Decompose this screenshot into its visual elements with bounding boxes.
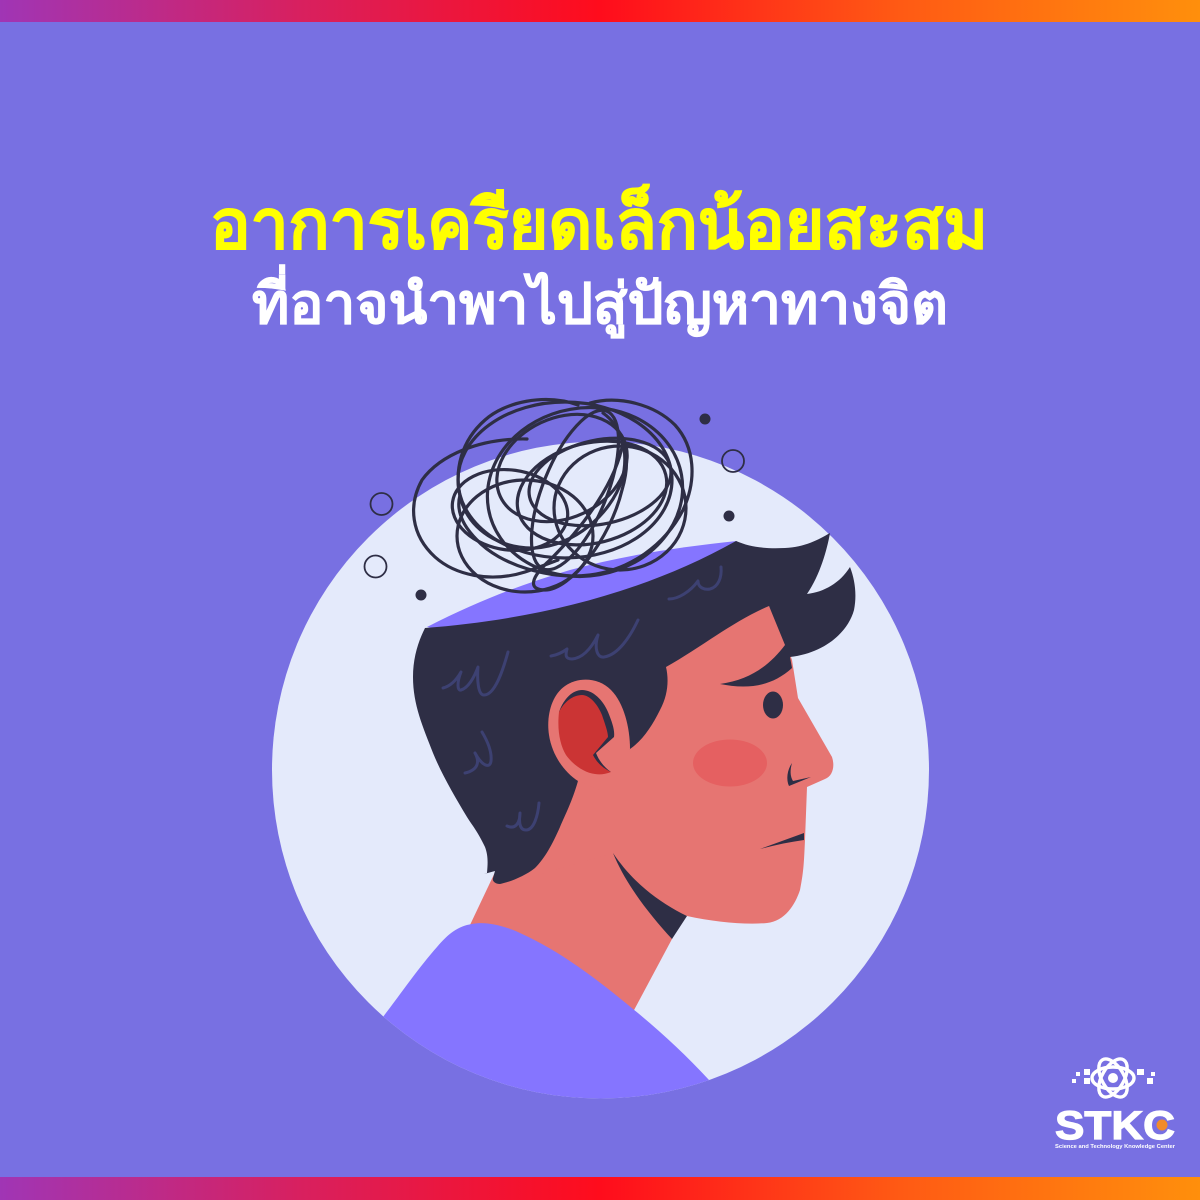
eye (763, 692, 783, 718)
blush (693, 740, 767, 786)
logo atom icon (1092, 1054, 1134, 1102)
nose mark (787, 763, 811, 786)
title line 2: ที่อาจนำพาไปสู่ปัญหาทางจิต (252, 264, 948, 339)
title (210, 184, 988, 339)
logo: STKC (1055, 1054, 1176, 1150)
dots and bubbles (364, 414, 744, 600)
hair (413, 533, 855, 884)
jaw shadow (613, 853, 687, 939)
logo pixel squares (1072, 1069, 1155, 1084)
top gradient bar (0, 0, 1200, 22)
shirt (384, 923, 709, 1098)
illustration: man's head (370, 533, 855, 1120)
neck (440, 820, 690, 1012)
scribble (414, 392, 696, 592)
ear (548, 680, 630, 790)
logo wordmark: STKC (1055, 1104, 1175, 1148)
hair curls (443, 567, 721, 830)
logo orange dot (1156, 1120, 1168, 1130)
ear inner dark (559, 690, 614, 772)
head opening (427, 541, 737, 640)
face (520, 600, 833, 924)
background circle (272, 442, 929, 1098)
logo tagline: Science and Technology Knowledge Center (1055, 1144, 1176, 1150)
ear outer (548, 680, 630, 790)
title line 1: อาการเครียดเล็กน้อยสะสม (210, 184, 988, 263)
ear inner red (558, 695, 611, 774)
mouth (760, 833, 804, 849)
bottom gradient bar (0, 1177, 1200, 1200)
